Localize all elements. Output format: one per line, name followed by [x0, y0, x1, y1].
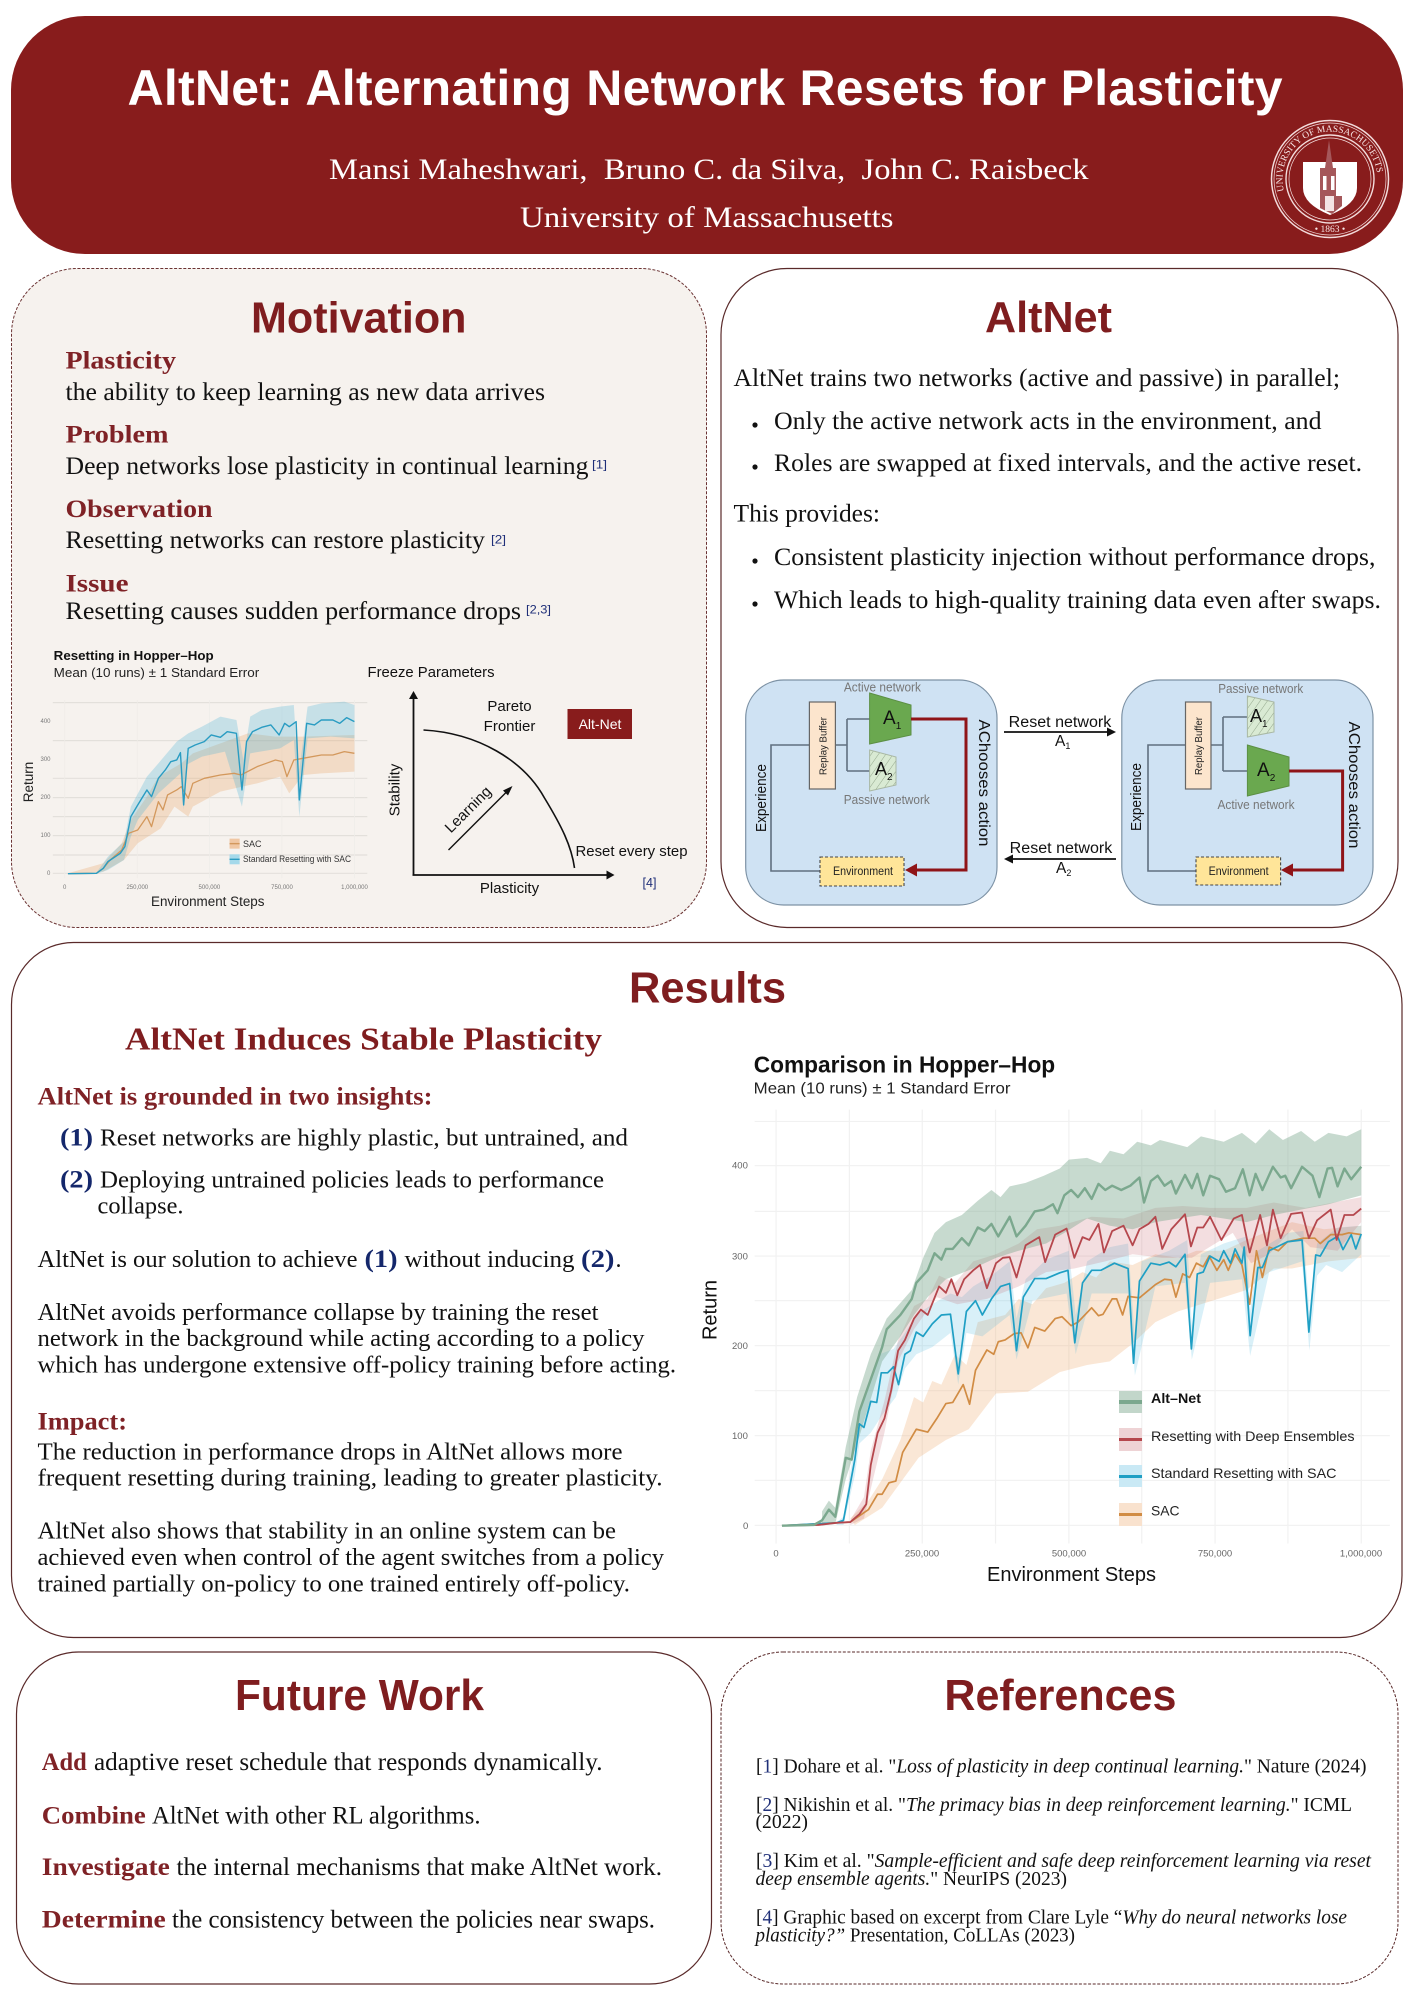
chart: comparison in hopper-hop: 0 [773, 1548, 779, 1560]
panel: results [12, 942, 1402, 1638]
label: alt-net box [568, 709, 632, 739]
diagram: altnet right state: Active network [1218, 798, 1295, 812]
arrow: chooses action [905, 719, 966, 876]
icon: university seal: • 1863 • [1315, 225, 1345, 235]
text: altnet description: Only the active network acts in the environment, and [774, 408, 1322, 435]
diagram: pareto frontier [368, 664, 688, 897]
text: stability [38, 1518, 664, 1598]
title: AltNet: Alternating Network Resets for Plasticity [128, 60, 1283, 116]
band: alt-net [822, 1129, 1361, 1526]
text: two insights: (1) [60, 1124, 93, 1152]
text: problem: Deep networks lose plasticity in continual learning [66, 453, 589, 480]
arrow: reset network a2: Reset network [1010, 840, 1113, 857]
reference 3 [756, 1851, 1372, 1890]
passive network a2 [870, 750, 896, 791]
replay buffer [1186, 702, 1211, 789]
authors: Mansi Maheshwari, Bruno C. da Silva, John C. Raisbeck [329, 153, 1088, 186]
arrow: reset network a1: A [1055, 733, 1065, 750]
text: avoids collapse: network in the background while acting according to a policy [38, 1326, 645, 1352]
environment: Environment [833, 866, 894, 878]
active network a2 [1247, 745, 1289, 796]
panel: references [721, 1652, 1398, 1984]
chart: resetting in hopper-hop: SAC [243, 839, 262, 849]
text: altnet description: Consistent plasticity injection without performance drops, [774, 544, 1376, 571]
environment [820, 857, 904, 886]
text: issue [66, 570, 551, 625]
text: two insights [38, 1084, 628, 1220]
panel: altnet [721, 268, 1398, 928]
active network a1: A [883, 708, 896, 729]
chart: resetting in hopper-hop: Mean (10 runs) ± 1 Standard Error [54, 665, 260, 680]
text: avoids collapse [38, 1300, 676, 1378]
diagram: pareto frontier: Freeze Parameters [368, 664, 494, 681]
passive network a2: 2 [887, 772, 893, 783]
active network a2: 2 [1270, 773, 1276, 784]
chart: comparison in hopper-hop: 750,000 [1198, 1548, 1232, 1560]
text: issue: [2,3] [526, 602, 551, 616]
text: two insights: collapse. [98, 1194, 184, 1220]
arrow: reset network a1 [1004, 714, 1116, 751]
band: standard resetting [837, 1226, 1361, 1525]
passive network a1: A [1250, 706, 1262, 726]
panel: motivation [12, 268, 706, 928]
text: problem [66, 422, 607, 480]
diagram: pareto frontier: Learning [442, 783, 495, 836]
legend: Resetting with Deep Ensembles [1151, 1428, 1354, 1444]
chart: comparison in hopper-hop: 200 [732, 1341, 748, 1352]
text: impact: Impact: [38, 1408, 127, 1436]
replay buffer [809, 702, 835, 789]
text: two insights: Reset networks are highly plastic, but untrained, and [100, 1126, 628, 1152]
chart: comparison in hopper-hop: Comparison in Hopper–Hop [754, 1052, 1055, 1078]
replay buffer: Replay Buffer [818, 717, 830, 775]
text: solution statement: (1) [364, 1246, 398, 1273]
text: avoids collapse: AltNet avoids performance collapse by training the reset [38, 1300, 599, 1326]
text: problem: Problem [66, 422, 169, 448]
chart: comparison in hopper-hop: 300 [732, 1252, 748, 1262]
diagram: altnet left state: Passive network [844, 793, 931, 807]
diagram: pareto frontier: Frontier [484, 718, 535, 735]
text: stability: AltNet also shows that stability in an online system can be [38, 1518, 616, 1544]
chart: resetting in hopper-hop: 300 [40, 757, 51, 763]
active network a1: 1 [896, 721, 902, 732]
chart: resetting in hopper-hop: 0 [47, 871, 51, 877]
legend: SAC [1151, 1502, 1180, 1518]
chart: comparison in hopper-hop: 500,000 [1052, 1548, 1086, 1560]
text: plasticity definition [66, 348, 545, 406]
text: impact [38, 1408, 662, 1492]
chart: comparison in hopper-hop: 1,000,000 [1340, 1548, 1382, 1560]
arrow: reset network a1: Reset network [1009, 714, 1112, 731]
reference 1: [1] Dohare et al. "Loss of plasticity in deep continual learning." Nature (2024) [756, 1756, 1366, 1778]
item: investigate: Investigate [42, 1854, 170, 1881]
text: stability: trained partially on-policy to one trained entirely off-policy. [38, 1572, 630, 1598]
reference 3: deep ensemble agents." NeurIPS (2023) [756, 1869, 1067, 1890]
text: two insights: AltNet is grounded in two insights: [38, 1084, 432, 1110]
reference 4: [4] Graphic based on excerpt from Clare Lyle “Why do neural networks lose [756, 1908, 1347, 1928]
text: solution statement: (2) [581, 1246, 614, 1273]
diagram: altnet right state: Passive network [1218, 682, 1304, 696]
band: deep ensembles [850, 1197, 1361, 1525]
text: problem: [1] [592, 458, 607, 472]
arrow: stability axis [412, 698, 414, 875]
diagram: pareto frontier: Reset every step [576, 843, 688, 860]
passive network a1 [1247, 696, 1274, 737]
diagram: altnet left state: Active network [844, 680, 922, 694]
reference 2 [756, 1795, 1352, 1833]
diagram: pareto frontier: Stability [386, 763, 404, 816]
chart: resetting in hopper-hop: 100 [40, 833, 51, 839]
chart: resetting in hopper-hop: 500,000 [199, 885, 221, 891]
chart: resetting in hopper-hop: 250,000 [126, 885, 149, 891]
panel: future work [16, 1652, 712, 1984]
arrow: reset network a2: 2 [1066, 868, 1071, 878]
label: alt-net box: Alt-Net [579, 716, 621, 732]
affiliation: University of Massachusetts [520, 201, 894, 234]
text: two insights: (2) [60, 1166, 93, 1194]
text: plasticity definition: Plasticity [66, 348, 177, 374]
text: observation: [2] [491, 532, 506, 546]
chart: resetting in hopper-hop: Environment Steps [151, 894, 265, 909]
legend: Alt–Net [1151, 1390, 1201, 1406]
replay buffer: Replay Buffer [1193, 717, 1205, 775]
environment: Environment [1209, 866, 1269, 878]
text: two insights: Deploying untrained policies leads to performance [100, 1168, 604, 1194]
reference 2: (2022) [756, 1812, 808, 1833]
text: observation: Resetting networks can restore plasticity [66, 527, 486, 554]
text: altnet description [734, 365, 1381, 614]
arrow: reset network a1: 1 [1065, 741, 1070, 751]
chart: comparison in hopper-hop: Environment Steps [987, 1564, 1156, 1586]
reference 2: [2] Nikishin et al. "The primacy bias in deep reinforcement learning." ICML [756, 1795, 1352, 1816]
heading: motivation: Motivation [251, 294, 466, 342]
item: determine: the consistency between the policies near swaps. [172, 1906, 655, 1934]
text: altnet description: Roles are swapped at fixed intervals, and the active reset. [774, 450, 1362, 477]
line: sac [782, 1233, 1361, 1526]
passive network a1: 1 [1262, 719, 1268, 730]
text: solution statement: . [616, 1247, 622, 1273]
arrow: reset network a2 [1004, 840, 1116, 878]
chart: resetting in hopper-hop: 0 [63, 885, 67, 891]
reference 4: plasticity?” Presentation, CoLLAs (2023) [754, 1926, 1075, 1946]
heading: altnet: AltNet [985, 293, 1112, 342]
text: issue: Issue [66, 570, 128, 598]
text: avoids collapse: which has undergone extensive off-policy training before acting. [38, 1352, 676, 1378]
chart: resetting in hopper-hop: 1,000,000 [341, 885, 369, 891]
chart: resetting in hopper-hop [21, 648, 369, 909]
diagram: altnet right state: AChooses action [1345, 721, 1362, 849]
text: altnet description: AltNet trains two networks (active and passive) in parallel; [734, 365, 1340, 392]
item: add: adaptive reset schedule that responds dynamically. [94, 1749, 602, 1776]
heading: future work: Future Work [235, 1671, 485, 1720]
heading: results: Results [629, 964, 786, 1012]
item: investigate: the internal mechanisms that make AltNet work. [176, 1854, 662, 1881]
line: deep ensembles [782, 1209, 1361, 1526]
icon: university seal: UNIVERSITY OF MASSACHUSETTS [1276, 125, 1383, 192]
text: altnet description: This provides: [734, 500, 880, 528]
diagram: altnet left state [746, 680, 997, 905]
text: plasticity definition: the ability to keep learning as new data arrives [66, 379, 545, 406]
chart: comparison in hopper-hop: Mean (10 runs) ± 1 Standard Error [754, 1080, 1011, 1098]
chart: comparison in hopper-hop: 0 [743, 1521, 748, 1532]
chart: resetting in hopper-hop: Resetting in Hopper–Hop [54, 648, 214, 663]
legend: Standard Resetting with SAC [1151, 1465, 1336, 1481]
subheading: altnet induces stable plasticity: AltNet Induces Stable Plasticity [125, 1020, 602, 1056]
chart: comparison in hopper-hop: 400 [732, 1160, 748, 1172]
chart: comparison in hopper-hop: Return [700, 1280, 722, 1340]
item: add: Add [42, 1749, 87, 1776]
reference 4 [754, 1908, 1347, 1946]
diagram: altnet left state: AChooses action [975, 719, 992, 847]
text: solution statement [38, 1246, 622, 1273]
item: combine: AltNet with other RL algorithms. [152, 1802, 480, 1830]
diagram: altnet right state [1122, 680, 1373, 905]
chart: comparison in hopper-hop [700, 1052, 1390, 1586]
chart: comparison in hopper-hop: 100 [732, 1431, 748, 1442]
diagram: altnet right state: Experience [1129, 763, 1145, 831]
active network a1 [870, 693, 911, 744]
item: combine: Combine [42, 1802, 146, 1830]
text: altnet description: Which leads to high-quality training data even after swaps. [774, 587, 1381, 614]
item: determine: Determine [42, 1906, 166, 1934]
arrow: plasticity axis [412, 874, 606, 876]
reference 3: [3] Kim et al. "Sample-efficient and safe deep reinforcement learning via reset [756, 1851, 1372, 1872]
arrow: chooses action [1281, 771, 1343, 876]
line: alt-net [782, 1167, 1361, 1526]
line: standard resetting [782, 1234, 1361, 1526]
text: issue: Resetting causes sudden performance drops [66, 598, 521, 625]
diagram: pareto frontier: Pareto [487, 698, 532, 715]
chart: comparison in hopper-hop: 250,000 [905, 1548, 939, 1560]
text: observation [66, 496, 506, 554]
legend [1119, 1390, 1354, 1526]
chart: resetting in hopper-hop: 400 [40, 719, 51, 725]
chart: resetting in hopper-hop: 200 [40, 795, 51, 801]
chart: resetting in hopper-hop: 750,000 [271, 885, 294, 891]
chart: resetting in hopper-hop: Standard Resetting with SAC [243, 854, 351, 864]
icon: university seal [1270, 120, 1390, 238]
text: impact: frequent resetting during training, leading to greater plasticity. [38, 1466, 662, 1492]
heading: references: References [944, 1671, 1176, 1720]
text: solution statement: without inducing [404, 1247, 574, 1273]
arrow: reset network a2: A [1056, 860, 1066, 877]
diagram: altnet left state: Experience [754, 764, 770, 832]
text: impact: The reduction in performance drops in AltNet allows more [38, 1440, 622, 1466]
passive network a2: A [875, 759, 887, 779]
band: sac [850, 1222, 1361, 1525]
active network a2: A [1257, 760, 1270, 781]
text: stability: achieved even when control of the agent switches from a policy [38, 1545, 664, 1571]
text: solution statement: AltNet is our solution to achieve [38, 1247, 358, 1273]
environment [1196, 857, 1281, 885]
diagram: pareto frontier: [4] [643, 876, 656, 890]
diagram: pareto frontier: Plasticity [480, 880, 540, 897]
header banner [11, 16, 1403, 254]
text: observation: Observation [66, 496, 213, 523]
chart: resetting in hopper-hop: Return [21, 762, 36, 802]
